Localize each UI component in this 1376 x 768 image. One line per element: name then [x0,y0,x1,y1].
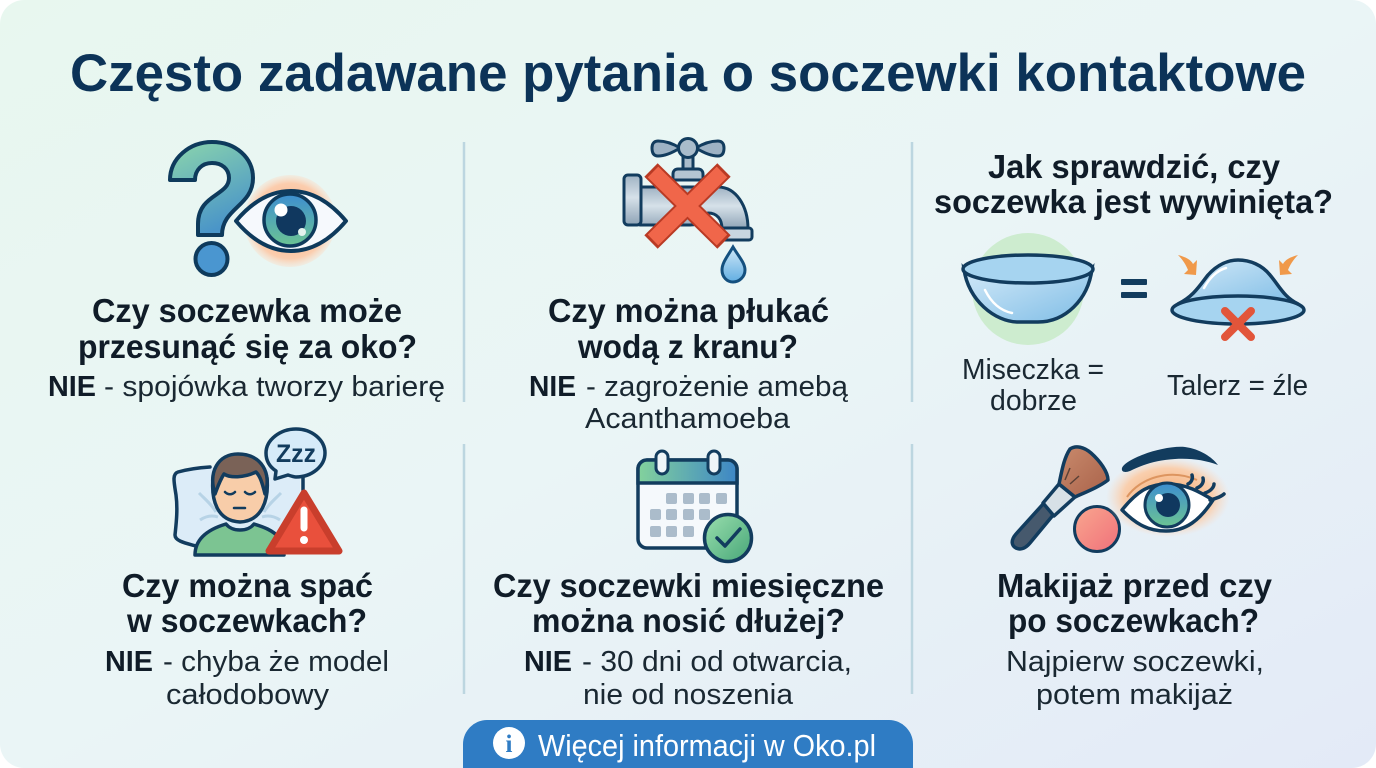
answer: makeup: Najpierw soczewki, [1006,646,1264,678]
heading: lens behind eye [78,292,417,365]
heading: inverted lens: soczewka jest wywinięta? [934,183,1333,220]
answer: lens behind eye: NIE [48,371,96,403]
footer button [463,720,913,768]
label: bowl is good: Miseczka = [962,354,1104,386]
icon: correct bowl-shaped lens [963,233,1093,345]
heading: makeup: Makijaż przed czy [997,567,1273,604]
answer: monthly lenses [524,646,852,711]
answer: sleeping: - chyba że model [163,646,389,678]
heading: tap water: Czy można płukać [548,292,829,329]
panel: inverted lens check [934,148,1333,417]
heading: inverted lens [934,148,1333,220]
icon: sleeping person with warning: Zzz [276,440,316,468]
answer: tap water: - zagrożenie amebą [586,371,849,403]
heading: sleeping: Czy można spać [122,567,373,604]
answer: sleeping: NIE [105,646,153,678]
answer: tap water [529,371,849,435]
heading: tap water [548,292,829,365]
heading: tap water: wodą z kranu? [577,328,798,365]
heading: makeup [997,567,1273,639]
icon: info: i [506,731,513,758]
icon: calendar with check [638,451,752,562]
icon: crossed-out tap with drop [624,138,752,282]
heading: inverted lens: Jak sprawdzić, czy [988,148,1281,185]
answer: makeup [1006,646,1264,711]
heading: monthly lenses: Czy soczewki miesięczne [493,567,884,604]
answer: tap water: Acanthamoeba [585,403,791,435]
answer: sleeping: całodobowy [166,679,330,711]
label: bowl is good [962,354,1104,417]
label: plate is bad: Talerz = źle [1167,370,1308,402]
icon: wrong plate-shaped lens [1172,255,1304,337]
heading: lens behind eye: Czy soczewka może [92,292,402,329]
answer: monthly lenses: nie od noszenia [583,679,794,711]
answer: makeup: potem makijaż [1036,679,1233,711]
answer: sleeping [105,646,389,711]
icon: question mark and eye [170,142,346,275]
answer: monthly lenses: - 30 dni od otwarcia, [582,646,852,678]
icon: info [493,727,525,759]
answer: monthly lenses: NIE [524,646,572,678]
panel: lens behind the eye [48,142,445,403]
heading: sleeping [122,567,373,639]
title: Często zadawane pytania o soczewki kontaktowe [70,44,1306,103]
panel: sleeping in lenses [105,429,389,711]
heading: monthly lenses [493,567,884,639]
answer: lens behind eye: - spojówka tworzy barierę [104,371,445,403]
panel: monthly lenses [493,451,884,711]
label: bowl is good: dobrze [990,385,1077,417]
heading: makeup: po soczewkach? [1008,602,1259,639]
heading: monthly lenses: można nosić dłużej? [532,602,845,639]
icon: sleeping person with warning [174,429,339,555]
panel: makeup [997,447,1273,711]
panel: tap water [529,138,849,435]
heading: lens behind eye: przesunąć się za oko? [78,328,417,365]
answer: tap water: NIE [529,371,576,403]
icon: equals sign [1121,279,1147,298]
icon: makeup brush, blush and eye [1012,447,1230,552]
footer text: Więcej informacji w Oko.pl [538,728,876,763]
heading: sleeping: w soczewkach? [126,602,367,639]
